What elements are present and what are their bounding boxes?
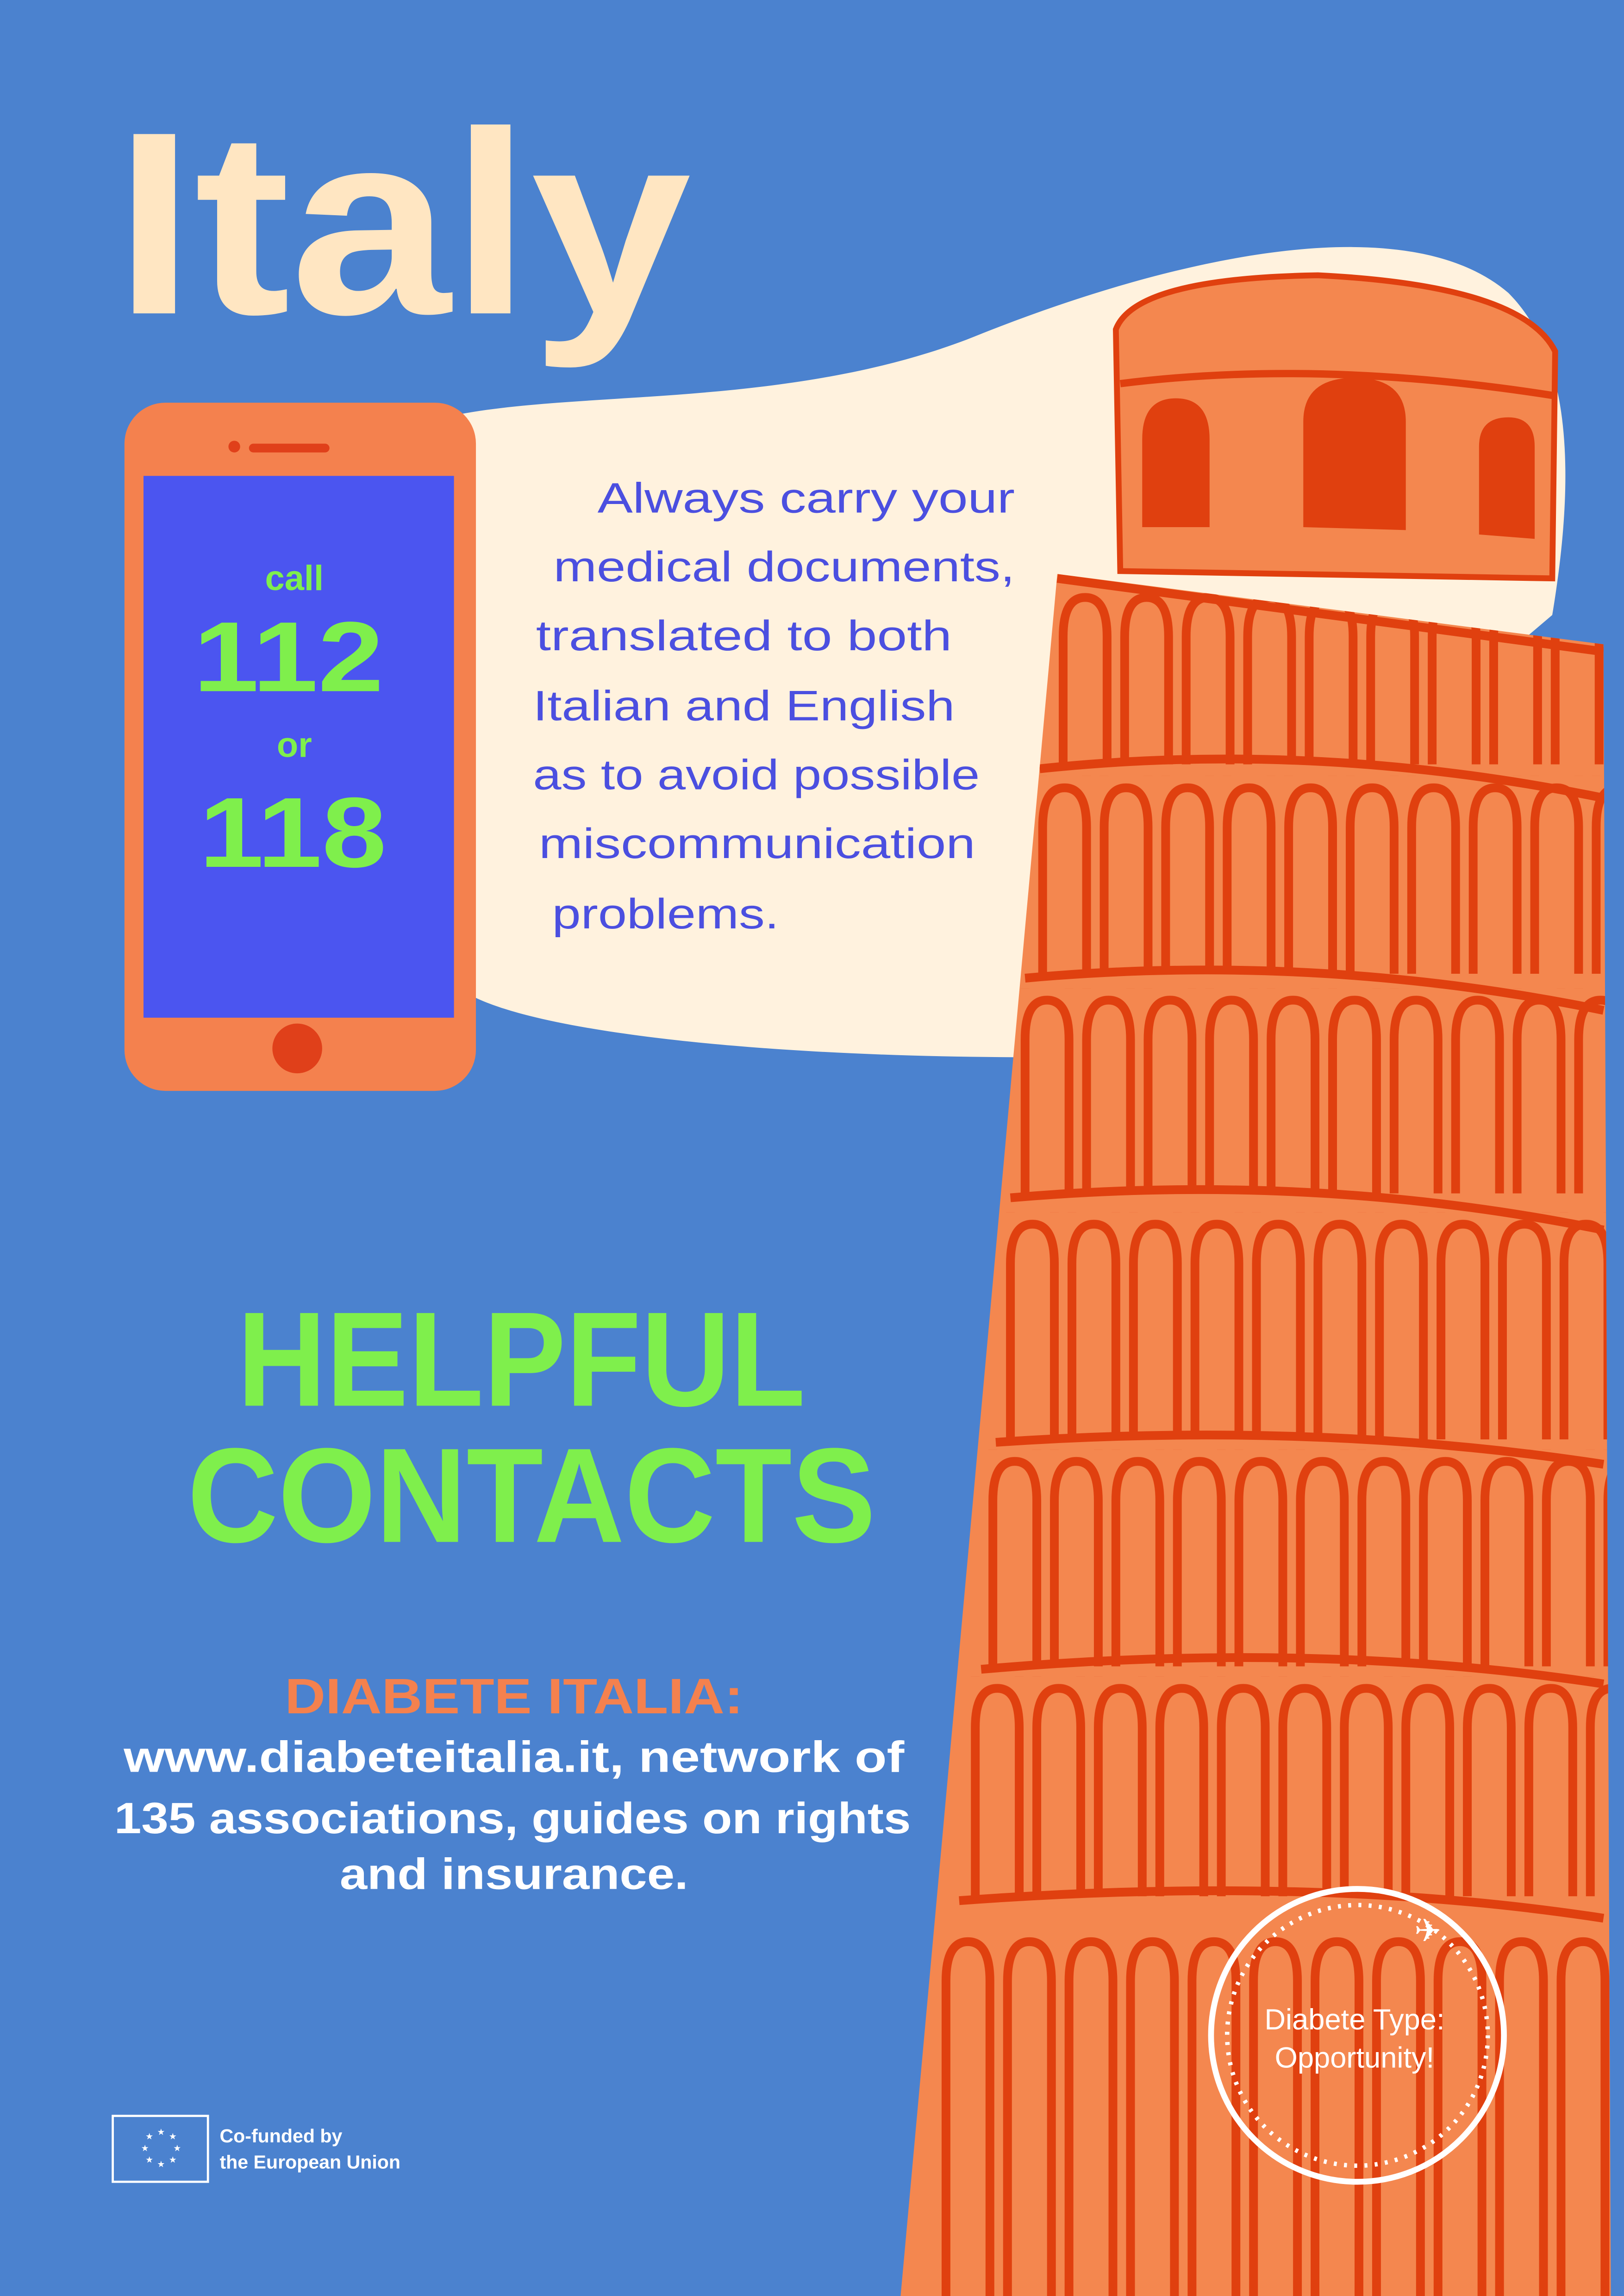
contact: Diabete Italia: 135 associations, guides on rights xyxy=(114,1794,911,1843)
advice text: miscommunication xyxy=(539,820,975,867)
phone numbers: or xyxy=(277,726,312,765)
badge: Opportunity! xyxy=(1275,2041,1434,2074)
badge: Diabete Type: xyxy=(1264,2004,1445,2036)
phone screen xyxy=(144,476,454,1018)
icon: plane: ✈ xyxy=(1414,1912,1441,1948)
EU logo: ★ xyxy=(145,2132,153,2141)
title: Italy xyxy=(114,78,693,370)
EU logo: Co-funded by xyxy=(219,2125,342,2147)
phone numbers: 112 xyxy=(194,601,384,712)
EU logo: ★ xyxy=(141,2144,149,2153)
advice text xyxy=(533,474,1015,938)
contact: Diabete Italia: www.diabeteitalia.it, network of xyxy=(123,1732,905,1781)
advice text: Italian and English xyxy=(533,683,955,730)
phone xyxy=(125,403,476,1091)
phone numbers: call xyxy=(265,559,324,598)
EU logo: the European Union xyxy=(219,2152,400,2173)
phone numbers: 118 xyxy=(199,777,387,888)
EU logo: ★ xyxy=(173,2144,181,2153)
badge xyxy=(1211,1889,1504,2182)
EU logo: ★ xyxy=(157,2128,165,2137)
advice text: problems. xyxy=(552,890,779,938)
heading: helpful contacts: CONTACTS xyxy=(187,1420,876,1571)
tower xyxy=(900,275,1624,2296)
contact: Diabete Italia xyxy=(114,1668,911,1898)
heading: helpful contacts xyxy=(187,1284,876,1571)
contact: Diabete Italia: and insurance. xyxy=(340,1849,688,1898)
EU logo: ★ xyxy=(145,2155,153,2165)
contact: Diabete Italia: DIABETE ITALIA: xyxy=(285,1668,743,1724)
advice text: medical documents, xyxy=(554,543,1015,591)
phone numbers xyxy=(194,559,387,888)
tower top xyxy=(1116,275,1555,579)
advice text: Always carry your xyxy=(598,474,1015,522)
EU logo xyxy=(113,2116,400,2182)
advice text: translated to both xyxy=(536,612,952,660)
EU logo: ★ xyxy=(169,2155,177,2165)
cream wave banner xyxy=(410,247,1565,1057)
heading: helpful contacts: HELPFUL xyxy=(237,1284,806,1434)
EU logo: ★ xyxy=(157,2160,165,2170)
EU logo: ★ xyxy=(169,2132,177,2141)
tower body xyxy=(900,574,1611,2296)
advice text: as to avoid possible xyxy=(533,751,980,798)
